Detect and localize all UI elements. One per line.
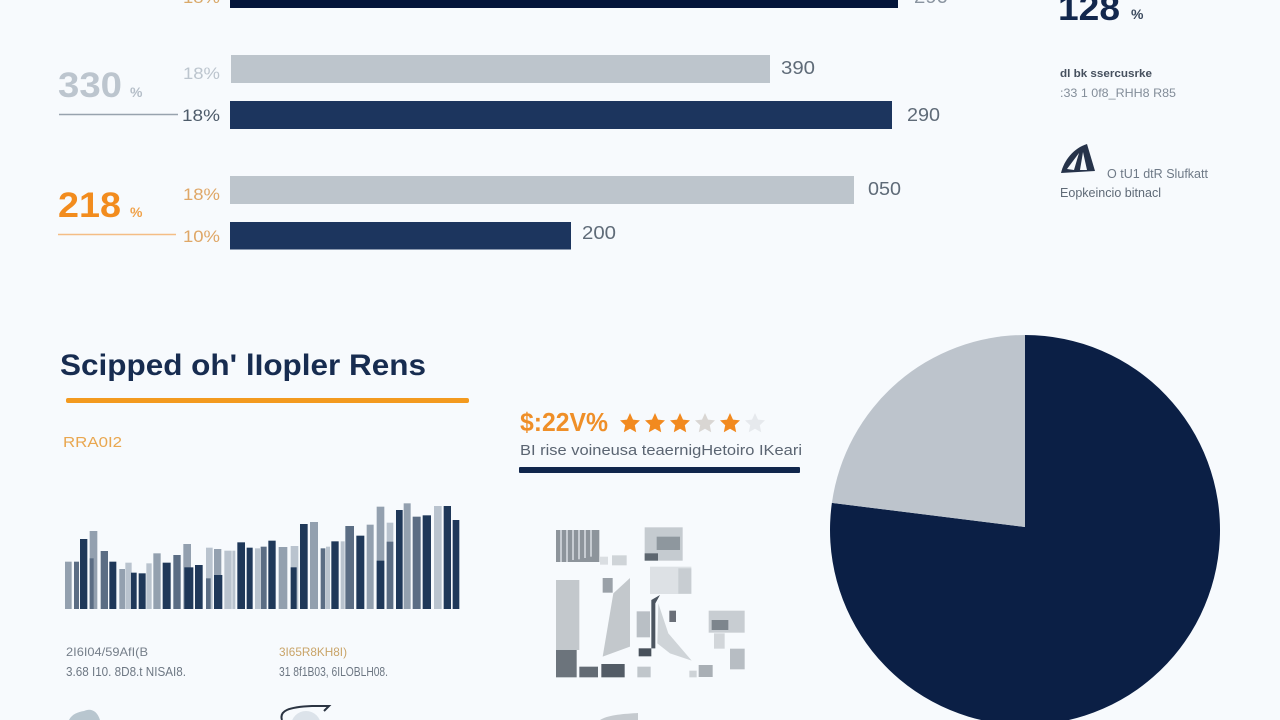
row label: 330 % xyxy=(58,66,178,114)
panel: rating xyxy=(519,407,802,473)
bar: gray 050 xyxy=(183,176,901,204)
bar: navy 200: 200 xyxy=(582,223,616,243)
row label: 218 %: % xyxy=(130,204,143,220)
panel: photo mosaic xyxy=(556,527,745,677)
stat: 128 %: % xyxy=(1131,6,1144,22)
bar chart: column bars xyxy=(65,503,459,609)
stat: 128 % xyxy=(1058,0,1144,28)
icon: stars xyxy=(620,413,765,432)
text block: chart caption right: 31 8f1B03, 6ILOBLH08. xyxy=(279,664,388,679)
bar: navy 290 xyxy=(182,101,940,129)
text block: icon caption xyxy=(1060,166,1208,200)
row label: 218 % xyxy=(58,186,176,234)
row label: 330 %: 330 xyxy=(58,66,122,105)
bar: navy 290: 290 xyxy=(907,105,940,125)
text block: icon caption: Eopkeincio bitnacl xyxy=(1060,185,1161,200)
pie slice: navy xyxy=(830,335,1220,720)
bar: gray 050: 18% xyxy=(183,185,220,204)
text block: icon caption: O tU1 dtR Slufkatt xyxy=(1107,166,1208,181)
panel: right stat column xyxy=(1058,0,1208,200)
icon: cropped round figure xyxy=(281,706,329,720)
text block: chart caption right xyxy=(279,645,388,679)
bar: gray 390: 390 xyxy=(781,58,815,78)
panel: horizontal bar chart xyxy=(58,0,948,250)
text block: chart caption left: 2I6I04/59AfI(B xyxy=(66,645,148,659)
bar: gray 050: 050 xyxy=(868,179,901,199)
bar: cropped top navy bar xyxy=(183,0,948,8)
pie chart xyxy=(830,335,1220,720)
row label: 218 %: 218 xyxy=(58,186,121,225)
text block: stat caption: :33 1 0f8_RHH8 R85 xyxy=(1060,86,1176,100)
heading: section title: Scipped oh' lIopler Rens xyxy=(60,349,426,382)
icon: mountain xyxy=(1061,144,1095,173)
text block: rating caption: BI rise voineusa teaernigHetoiro IKeari xyxy=(520,442,802,459)
heading: section title xyxy=(60,349,469,403)
label: orange chart label: RRA0I2 xyxy=(63,434,122,451)
icon: cropped gray shape xyxy=(600,713,638,720)
icon: cropped cloud xyxy=(69,710,100,720)
bar: navy 200 xyxy=(183,222,616,250)
row label: 330 %: % xyxy=(130,84,143,100)
bar: gray 390 xyxy=(183,55,815,83)
bar: navy 290: 18% xyxy=(182,106,220,125)
text block: stat caption xyxy=(1060,68,1176,100)
rule: navy underline xyxy=(519,467,800,473)
text block: chart caption left xyxy=(66,645,186,679)
bar: gray 390: 18% xyxy=(183,64,220,83)
pie slice: gray xyxy=(832,335,1025,527)
bar: navy 200: 10% xyxy=(183,227,220,246)
text block: chart caption right: 3I65R8KH8I) xyxy=(279,645,347,659)
stat: rating value: $:22V% xyxy=(520,407,608,437)
text block: stat caption: dl bk ssercusrke xyxy=(1060,68,1152,80)
text block: chart caption left: 3.68 I10. 8D8.t NISAI8. xyxy=(66,664,186,679)
